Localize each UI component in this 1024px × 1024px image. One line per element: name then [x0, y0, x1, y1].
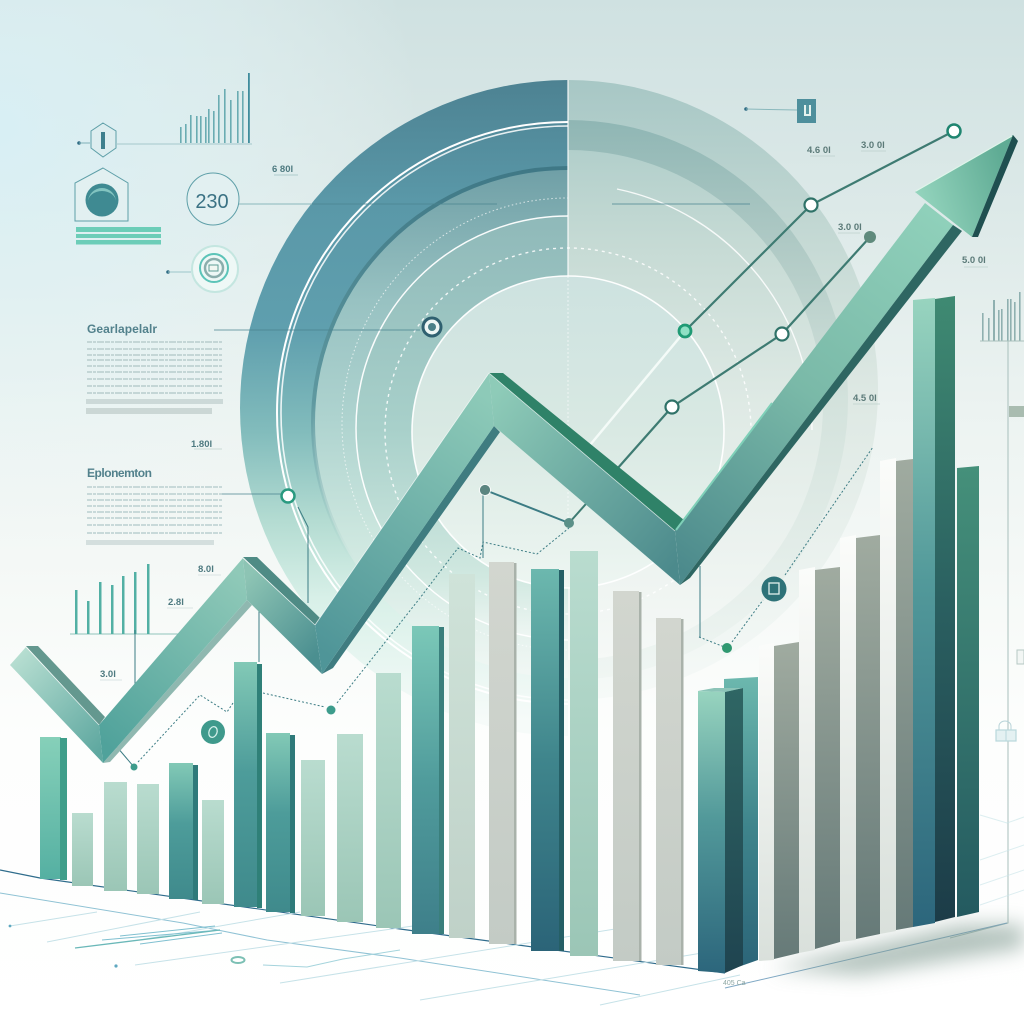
floor shadow — [770, 925, 1024, 975]
right mini bar chart and frame — [950, 292, 1024, 938]
leader lines from circle — [214, 204, 750, 494]
small metric labels — [100, 140, 988, 680]
small metric labels: 3.0l — [100, 669, 116, 680]
small metric labels: 1.80l — [191, 439, 212, 450]
axis label bottom: 405 Ca — [723, 980, 746, 987]
bars left group — [40, 662, 401, 928]
house icon with teal disc — [75, 168, 161, 244]
bars right group — [698, 296, 979, 973]
floor grid — [0, 815, 1024, 1005]
zigzag growth arrow — [10, 135, 1018, 763]
small metric labels: 8.0l — [198, 564, 214, 575]
text block: second section — [86, 466, 223, 545]
arrow edges — [26, 646, 105, 725]
text block: first section: Gearlapelalr — [87, 322, 157, 336]
text block: second section: Eplonemton — [87, 466, 152, 480]
stat circle 230 — [187, 173, 312, 225]
dotted connector lines — [117, 447, 873, 767]
arrow shaft — [675, 203, 953, 585]
small metric labels: 4.6 0l — [807, 145, 831, 156]
bars middle group — [412, 551, 684, 965]
top-left mini bar chart with hexagon icon — [77, 73, 252, 157]
small metric labels: 4.5 0l — [853, 393, 877, 404]
arrow head — [915, 135, 1013, 237]
trend line markers — [666, 124, 960, 414]
ring target icon — [166, 246, 238, 292]
concentric circle graphic — [240, 80, 896, 736]
markers on circle — [282, 316, 442, 502]
top right tag icon — [744, 99, 816, 123]
small bar chart, lower left — [70, 564, 178, 634]
small metric labels: 2.8l — [168, 597, 184, 608]
small round icons on chart — [201, 576, 786, 744]
arrow body segments — [10, 647, 103, 763]
small metric labels: 3.0 0l — [838, 222, 862, 233]
upper trend lines — [590, 131, 954, 469]
bar chart — [40, 296, 979, 973]
small metric labels: 5.0 0l — [962, 255, 986, 266]
text block: first section — [86, 322, 223, 414]
small metric labels: 3.0 0l — [861, 140, 885, 151]
connector nodes — [130, 484, 732, 770]
small metric labels: 6 80l — [272, 164, 293, 175]
stat circle 230: 230 — [195, 191, 229, 213]
